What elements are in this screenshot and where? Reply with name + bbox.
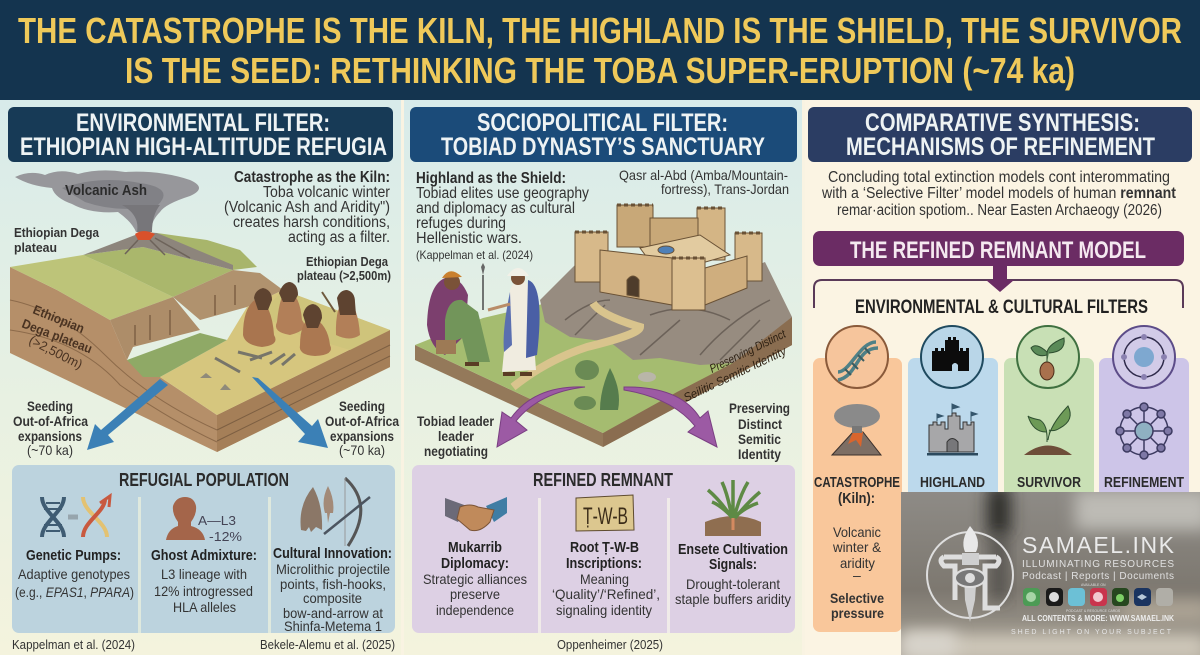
illustration: seated foragers [200,282,360,390]
text: genetic pumps: Genetic Pumps: [26,547,121,564]
label: cliff text [20,302,94,372]
card group: refined remnant: REFINED REMNANT [533,470,673,490]
label: cliff text: Dega plateau [20,316,94,356]
label: seeding right: Seeding [339,398,385,414]
icon: ghost admixture silhouette: A—L3 [198,513,236,528]
icon: seed in circle [1017,326,1079,388]
text: watermark footer: SHED LIGHT ON YOUR SUBJECT [1011,629,1174,636]
label: seeding left: Seeding [27,398,73,414]
label: seeding left: Out-of-Africa [13,413,88,429]
text: ensete signals: Ensete Cultivation [678,541,788,558]
card group: refined remnant [412,465,795,633]
watermark background photo [901,485,1200,655]
label: seeding left: expansions [18,428,82,444]
icon: grey castle [927,404,978,456]
text: highland as the shield: (Kappelman et al. (2024) [416,248,533,262]
text: root T-W-B [552,539,660,618]
icon: castle in circle [921,326,983,388]
text: samael.ink wordmark [1022,532,1175,587]
icons: podcast platforms [1023,588,1173,606]
icon: projectile points and bow [300,478,370,546]
icon: network in circle [1113,326,1175,388]
label: seeding right: Out-of-Africa [325,413,399,429]
text: catastrophe: (Kiln): [838,490,875,507]
text: highland as the shield: and diplomacy as cultural [416,200,575,217]
text: cultural innovation: Shinfa-Metema 1 [284,618,382,634]
heading: sociopolitical filter: TOBIAD DYNASTY’S SANCTUARY [441,133,765,161]
text: cultural innovation: bow-and-arrow at [283,605,383,621]
text: samael.ink wordmark: ILLUMINATING RESOURCES [1022,559,1174,570]
label: preserving identity: Semitic [738,431,781,447]
text: mukarrib diplomacy: independence [436,602,514,618]
text: catastrophe: – [853,567,861,583]
text: catastrophe as the kiln: acting as a filter. [288,229,390,246]
illustration: Tobiad leader and envoy [427,263,540,376]
text: highland as the shield: Tobiad elites use geography [416,185,589,202]
heading: sociopolitical filter: SOCIOPOLITICAL FILTER: [477,109,728,137]
label: cliff text: (>2,500m) [27,332,85,372]
label: block side text: Seilitic Semitic Identity [681,343,789,405]
column: catastrophe [813,326,902,632]
label: dega plateau right: Ethiopian Dega [306,254,389,269]
text: catastrophe: CATASTROPHE [814,474,900,491]
text: cultural innovation: points, fish-hooks, [280,576,386,592]
label: seeding left: (~70 ka) [27,442,73,458]
text: root T-W-B: Meaning [580,571,629,587]
text: cultural innovation [273,545,392,634]
label: block side text: Preserving Distinct [707,326,788,376]
text: catastrophe: winter & [832,539,882,555]
arrow: seeding right [252,377,328,448]
text: mukarrib diplomacy: preserve [450,586,500,602]
panel: comparative synthesis [808,107,1192,632]
text: ensete signals: staple buffers aridity [675,591,791,607]
illustration: bushes and trees [574,360,656,410]
icon: DNA in circle [826,326,888,388]
label: preserving identity: Distinct [738,416,782,432]
label: dega plateau left: plateau [14,240,57,255]
icon: refinement network [1116,403,1172,459]
label: seeding left [13,398,88,458]
column: survivor [1004,326,1094,632]
text: catastrophe: Volcanic [833,524,881,540]
panel: sociopolitical filter [410,107,797,652]
panel: environmental filter [8,107,399,652]
text: watermark footer [1011,609,1174,636]
text: refinement: REFINEMENT [1104,474,1184,491]
label: Qasr al-Abd [619,167,789,197]
text: ghost admixture: Ghost Admixture: [151,547,257,564]
heading: environmental filter: ETHIOPIAN HIGH-ALTITUDE REFUGIA [20,133,387,161]
label: preserving identity: Preserving [729,400,790,416]
text: conclusion intro [821,169,1176,219]
icon: sprout [1024,406,1072,455]
text: catastrophe as the kiln: Catastrophe as the Kiln: [234,169,390,186]
label: dega plateau left: Ethiopian Dega [14,225,100,240]
heading: sociopolitical filter [410,107,797,162]
text: conclusion intro: Concluding total extinction models cont interommating [828,169,1170,186]
card group: refugial population [12,465,395,634]
label: dega plateau left [14,225,100,255]
connector: bracket with arrow [814,266,1183,308]
text: ensete signals [675,541,791,607]
text: samael.ink wordmark: Podcast | Reports | Documents [1022,571,1174,582]
column: refinement [1099,326,1189,632]
icon: ghost admixture silhouette [166,497,242,544]
citation: Kappelman: Kappelman et al. (2024) [12,637,135,652]
text: catastrophe as the kiln: creates harsh conditions, [233,214,390,231]
text: ghost admixture: L3 lineage with [161,566,247,582]
text: watermark footer: PODCAST & RESOURCE CARDS [1066,609,1121,613]
text: highland as the shield [416,170,589,262]
label: preserving identity [729,400,790,462]
illustration: terrain block [415,262,792,447]
text: cultural innovation: composite [303,590,362,606]
arrow: right purple [624,387,717,447]
text: catastrophe: Selective [830,590,884,606]
label: Tobiad leader [417,413,494,459]
text: samael.ink wordmark: AVAILABLE ON [1081,583,1106,587]
text: root T-W-B: signaling identity [556,602,652,618]
card group: refugial population: REFUGIAL POPULATION [119,470,289,490]
text: highland: HIGHLAND [920,474,985,491]
icon: T-W-B inscription [576,495,634,531]
text: root T-W-B: ‘Quality’/‘Refined’, [552,586,660,602]
citation: Bekele-Alemu: Bekele-Alemu et al. (2025) [260,637,395,652]
heading: environmental filter: ENVIRONMENTAL FILTER: [76,109,330,137]
column: highland [908,326,998,632]
icon: DNA pump [42,496,110,537]
text: genetic pumps: (e.g., EPAS1, PPARA) [15,584,134,600]
text: mukarrib diplomacy: Strategic alliances [423,571,527,587]
arrow: left purple [497,387,585,447]
label: Tobiad leader: Tobiad leader [417,413,494,429]
text: catastrophe as the kiln: Toba volcanic winter [263,184,390,201]
title banner [0,0,1200,100]
banner: the refined remnant model [813,231,1184,266]
text: genetic pumps: Adaptive genotypes [18,566,130,582]
text: mukarrib diplomacy: Diplomacy: [441,555,509,572]
illustration: ash cloud and volcano on terrain block [10,170,390,452]
heading: comparative synthesis: COMPARATIVE SYNTHESIS: [865,109,1140,137]
text: root T-W-B: Inscriptions: [566,555,642,572]
text: survivor: SURVIVOR [1017,474,1081,491]
text: samael.ink wordmark: SAMAEL.INK [1022,532,1175,558]
text: mukarrib diplomacy: Mukarrib [448,539,502,556]
label: cliff text: Ethiopian [31,302,87,336]
label: dega plateau right [297,254,391,283]
label: Tobiad leader: negotiating [424,443,488,459]
label: Qasr al-Abd: Qasr al-Abd (Amba/Mountain- [619,167,788,183]
text: genetic pumps [15,547,134,600]
text: ensete signals: Signals: [709,556,757,573]
text: cultural innovation: Cultural Innovation: [273,545,392,562]
text: highland as the shield: refuges during [416,215,506,232]
text: highland as the shield: Hellenistic wars. [416,230,522,247]
icon: ghost admixture silhouette: -12% [209,529,242,544]
citation: Oppenheimer: Oppenheimer (2025) [557,637,663,652]
heading: environmental filter [8,107,393,162]
text: ghost admixture [151,547,257,615]
label: Qasr al-Abd: fortress), Trans-Jordan [661,181,789,197]
icon: ensete plant [705,480,761,536]
icon: volcano [832,404,881,455]
text: catastrophe [814,474,900,621]
label: seeding right: expansions [330,428,394,444]
text: ghost admixture: HLA alleles [173,599,236,615]
text: catastrophe: pressure [831,605,884,621]
icon: T-W-B inscription: Ṭ-W-B [583,503,628,530]
heading: comparative synthesis [808,107,1192,162]
label: seeding right: (~70 ka) [339,442,385,458]
illustration: hilltop fortress [575,205,762,310]
text: root T-W-B: Root Ṭ-W-B [570,539,639,556]
label: preserving identity: Identity [738,446,781,462]
text: watermark footer: ALL CONTENTS & MORE: WWW.SAMAEL.INK [1022,614,1174,623]
label: seeding right [325,398,399,458]
arrow: seeding left [87,379,168,450]
logo: torch eye and pen emblem [927,526,1013,622]
text: highland as the shield: Highland as the Shield: [416,170,566,187]
text: mukarrib diplomacy [423,539,527,618]
label: dega plateau right: plateau (>2,500m) [297,268,391,283]
text: catastrophe: aridity [840,555,875,571]
text: ensete signals: Drought-tolerant [686,576,780,592]
label: volcanic ash: Volcanic Ash [65,182,147,199]
watermark: samael.ink [901,485,1200,655]
text: cultural innovation: Microlithic projectile [276,561,390,577]
text: catastrophe as the kiln [224,169,390,246]
text: catastrophe as the kiln: (Volcanic Ash and Aridity") [224,199,390,216]
label: Tobiad leader: leader [438,428,474,444]
icon: handshake [445,497,507,531]
text: conclusion intro: with a ‘Selective Filter’ model models of human remnant [821,185,1176,202]
text: ghost admixture: 12% introgressed [154,583,253,599]
